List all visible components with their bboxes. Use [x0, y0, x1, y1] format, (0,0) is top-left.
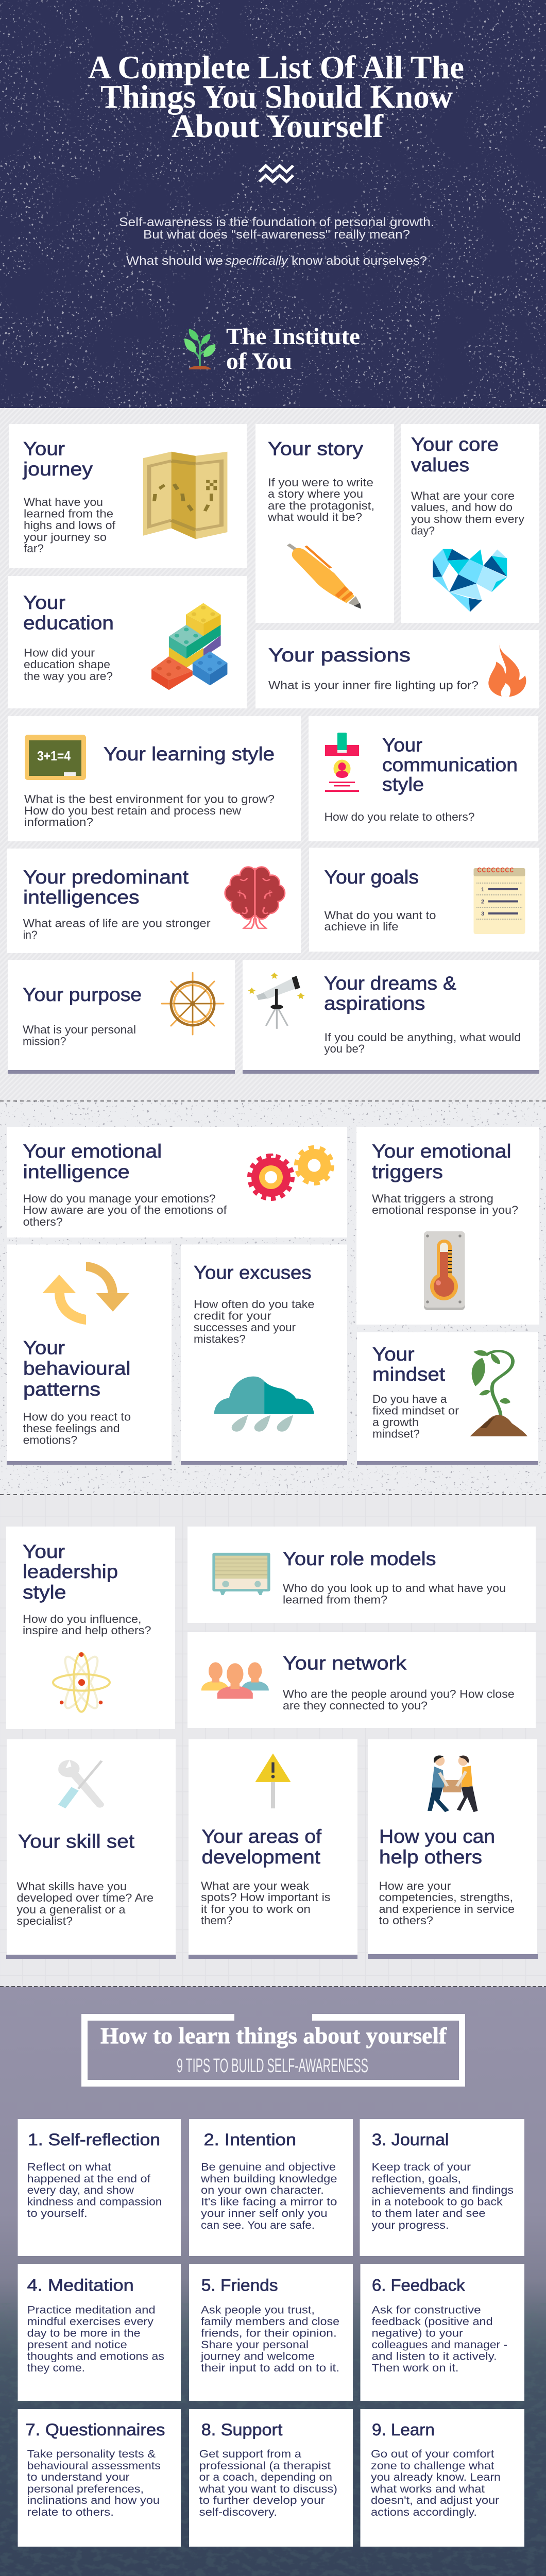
logo: wordmark — [226, 324, 360, 374]
section two speckle texture — [0, 1101, 546, 1495]
body text: What areas of life are you stronger — [23, 917, 211, 929]
body text: in? — [23, 928, 38, 941]
body text: mistakes? — [194, 1332, 246, 1346]
body text: What is the best environment for you to grow? — [24, 792, 275, 806]
tip text — [27, 2448, 161, 2518]
tips section forest background — [0, 1987, 546, 2576]
heading: triggers — [372, 1161, 443, 1182]
tip text — [199, 2448, 337, 2518]
heading — [23, 1141, 162, 1182]
body text: What do you want to — [325, 909, 436, 922]
tip text: actions accordingly. — [371, 2506, 477, 2518]
body text: successes and your — [194, 1321, 296, 1334]
body text: Who do you look up to and what have you — [283, 1582, 506, 1595]
body text: them? — [201, 1914, 233, 1927]
tip text: Ask for constructive — [372, 2304, 481, 2316]
tip heading: 3. Journal — [372, 2130, 449, 2149]
page background: header section — [0, 0, 546, 408]
heading: Your emotional — [372, 1141, 511, 1162]
tip text: achievements and findings — [372, 2184, 514, 2196]
heading: How you can — [379, 1826, 495, 1847]
accent bar — [189, 1955, 357, 1959]
heading: Your skill set — [18, 1831, 135, 1852]
intro text: Self-awareness is the foundation of personal growth. — [119, 215, 434, 229]
heading: Your — [23, 438, 65, 460]
icon: speaker at podium — [325, 733, 359, 792]
tip card: self-reflection — [18, 2119, 181, 2256]
body text: to others? — [379, 1914, 433, 1927]
body text: what would it be? — [267, 511, 362, 523]
heading: Your excuses — [194, 1262, 311, 1283]
intro text — [119, 215, 434, 268]
tip text: colleagues and manager - — [372, 2339, 507, 2351]
body text — [24, 646, 113, 683]
heading — [324, 973, 456, 1014]
body text — [16, 1880, 153, 1927]
body text: your journey so — [24, 531, 107, 544]
tip text: thoughts and emotions as — [27, 2350, 164, 2363]
tip text: you already know. Learn — [371, 2471, 501, 2483]
body text: emotions? — [23, 1434, 77, 1447]
panel: your behavioural patterns — [7, 1245, 172, 1465]
tip text: to further develop your — [199, 2495, 325, 2506]
body text: How do you react to — [23, 1411, 131, 1423]
tip text: to understand your — [27, 2471, 130, 2483]
tips heading box — [81, 2014, 465, 2087]
accent bar — [357, 1461, 538, 1465]
panel: how you can help others — [368, 1739, 538, 1959]
body text: How did your — [24, 646, 95, 659]
heading: Your role models — [283, 1548, 436, 1569]
tip text: Go out of your comfort — [371, 2448, 494, 2460]
heading — [23, 438, 93, 480]
tip text: Ask people you trust, — [201, 2304, 315, 2316]
body text: information? — [24, 816, 93, 828]
body text: spots? How important is — [201, 1891, 331, 1904]
body text: far? — [24, 542, 44, 555]
heading — [382, 735, 518, 795]
body text: it for you to work on — [201, 1903, 311, 1916]
tip text: can see. You are safe. — [201, 2219, 315, 2231]
tip text: or a coach, depending on — [199, 2471, 332, 2483]
heading: style — [382, 774, 424, 795]
panel: your leadership style — [6, 1527, 175, 1729]
heading: Your — [23, 1337, 65, 1358]
panel: your areas of development — [189, 1739, 357, 1959]
body text: highs and lows of — [24, 519, 116, 532]
heading: Your — [23, 592, 65, 613]
body text: you a generalist or a — [16, 1903, 126, 1916]
heading — [202, 1826, 322, 1868]
heading: education — [23, 612, 114, 633]
heading: development — [202, 1846, 321, 1868]
panel: your skill set — [6, 1739, 176, 1959]
header — [88, 49, 464, 374]
heading: Your goals — [325, 867, 419, 888]
tip text: relate to others. — [27, 2506, 114, 2518]
heading — [379, 1826, 495, 1868]
body text: What triggers a strong — [372, 1192, 493, 1205]
tip text: inclinations and how you — [27, 2495, 160, 2506]
section two speckled background — [0, 1101, 546, 1495]
icon: group of people — [201, 1662, 269, 1699]
icon: atom — [53, 1652, 110, 1712]
tip text: mindful exercises every — [27, 2316, 154, 2328]
body text: specialist? — [16, 1914, 73, 1927]
tip card: meditation — [18, 2264, 181, 2401]
heading: Your story — [268, 438, 364, 460]
tip card: feedback — [361, 2264, 524, 2401]
tip text: they come. — [27, 2362, 85, 2374]
heading — [372, 1141, 511, 1182]
body text: mission? — [23, 1035, 66, 1048]
tip text — [372, 2161, 514, 2231]
body text: What is your inner fire lighting up for? — [268, 679, 479, 691]
heading — [23, 1541, 118, 1603]
body text: What are your weak — [201, 1879, 310, 1892]
tip text: journey and welcome — [200, 2350, 315, 2363]
tip text: when building knowledge — [200, 2173, 337, 2185]
heading: How to learn things about yourself — [100, 2023, 447, 2048]
heading: Your network — [283, 1653, 407, 1674]
panel: your story — [255, 424, 394, 623]
panel: your learning style — [8, 716, 301, 841]
accent bar — [243, 1070, 539, 1074]
icon: wrench and screwdriver — [58, 1760, 104, 1808]
panel: your excuses — [181, 1245, 347, 1465]
body text: emotional response in you? — [372, 1204, 518, 1216]
heading: Your dreams & — [324, 973, 456, 994]
tip text: Be genuine and objective — [201, 2161, 336, 2173]
tip heading: 7. Questionnaires — [25, 2420, 165, 2439]
body text: How do you manage your emotions? — [23, 1192, 216, 1205]
body text: a story where you — [268, 487, 363, 500]
icon: flame — [488, 642, 526, 697]
body text: achieve in life — [325, 920, 399, 933]
tip text — [200, 2161, 337, 2231]
heading — [23, 592, 114, 633]
body text: competencies, strengths, — [379, 1891, 513, 1904]
panel: your network — [187, 1632, 536, 1728]
body text: you be? — [325, 1042, 365, 1055]
tip text: friends, for their opinion. — [201, 2328, 337, 2339]
heading: leadership — [23, 1561, 118, 1582]
tip text: Practice meditation and — [27, 2304, 156, 2316]
body text — [379, 1879, 515, 1927]
tip text — [200, 2304, 339, 2374]
heading: Your passions — [268, 645, 411, 666]
accent bar — [368, 1954, 538, 1959]
tip text: happened at the end of — [27, 2173, 150, 2185]
icon: telescope with stars — [248, 972, 305, 1029]
tip text: and listen to it actively. — [372, 2350, 497, 2363]
icon: numbered notepad: 3 — [481, 911, 484, 917]
tip text: Reflect on what — [27, 2161, 111, 2173]
body text: How do you best retain and process new — [24, 804, 241, 817]
tip heading: 2. Intention — [204, 2130, 296, 2149]
tip text: Get support from a — [199, 2448, 301, 2460]
body text — [283, 1688, 515, 1712]
heading: mindset — [372, 1364, 446, 1385]
intro text: know about ourselves? — [292, 254, 427, 268]
body text: others? — [23, 1215, 63, 1228]
forest foliage texture — [0, 2303, 546, 2576]
body text: How are your — [379, 1879, 451, 1892]
tip card: learn — [361, 2409, 524, 2547]
body text: learned from them? — [283, 1593, 387, 1606]
body text: values, and how do — [411, 501, 513, 514]
tip text: on your own character. — [201, 2184, 324, 2196]
panel: your predominant intelligences — [7, 849, 301, 953]
icon: lego bricks — [151, 603, 227, 690]
accent bar — [8, 1070, 235, 1074]
body text: inspire and help others? — [23, 1624, 151, 1637]
heading: Your learning style — [104, 743, 275, 765]
body text — [23, 1411, 131, 1447]
tip text: what works and what — [370, 2483, 485, 2495]
heading: aspirations — [324, 993, 425, 1014]
tip text: to them later and see — [372, 2208, 485, 2219]
panel: your communication style — [309, 716, 538, 841]
panel: your mindset — [357, 1332, 538, 1465]
icon: pen — [288, 545, 361, 609]
panel: your role models — [187, 1527, 536, 1623]
accent bar — [7, 1461, 172, 1465]
icon: brain — [224, 866, 285, 928]
heading: patterns — [23, 1379, 100, 1400]
icon: faceted heart — [433, 549, 507, 612]
panel: your passions — [255, 630, 539, 708]
icon: chalkboard: 3+1=4 — [37, 748, 71, 764]
title — [88, 49, 464, 144]
tip text: Keep track of your — [372, 2161, 471, 2173]
tip text: personal preferences, — [27, 2483, 144, 2495]
body text: If you could be anything, what would — [325, 1031, 521, 1044]
header speckle texture — [0, 0, 546, 408]
title: About Yourself — [172, 108, 384, 144]
heading — [23, 1337, 131, 1400]
tip text: professional (a therapist — [199, 2460, 331, 2472]
icon: ship wheel — [162, 973, 224, 1035]
tip heading: 9. Learn — [372, 2420, 435, 2439]
body text — [23, 1613, 151, 1637]
body text: learned from the — [24, 507, 113, 520]
frame — [81, 2014, 465, 2087]
intro text: specifically — [226, 254, 289, 268]
icon: cycle arrows — [42, 1262, 129, 1325]
body text: What have you — [24, 496, 103, 509]
panel: your emotional intelligence — [7, 1127, 347, 1238]
heading: Your emotional — [23, 1141, 162, 1162]
tip text — [370, 2448, 501, 2518]
body text — [194, 1298, 314, 1346]
body text: developed over time? Are — [16, 1891, 153, 1904]
body text — [24, 792, 275, 828]
icon: two people carrying a box — [428, 1755, 477, 1812]
body text: you show them every — [411, 513, 524, 526]
subheading: 9 TIPS TO BUILD SELF-AWARENESS — [177, 2055, 368, 2077]
body text — [283, 1582, 506, 1606]
body text — [201, 1879, 331, 1927]
section one hatched background — [0, 408, 546, 1101]
panel: your emotional triggers — [356, 1127, 539, 1325]
heading: help others — [379, 1846, 482, 1868]
tip card: journal — [360, 2119, 524, 2256]
tip text: every day, and show — [27, 2184, 134, 2196]
tip text: negative) to your — [372, 2328, 463, 2339]
tip text — [372, 2304, 507, 2374]
body text: What skills have you — [16, 1880, 127, 1893]
heading: Your core — [411, 434, 499, 455]
body text: How aware are you of the emotions of — [23, 1204, 227, 1216]
panel: your core values — [401, 424, 539, 623]
tip text: reflection, goals, — [372, 2173, 461, 2185]
tip text: self-discovery. — [199, 2506, 277, 2518]
body text: fixed mindset or — [372, 1404, 459, 1417]
body text: How do you influence, — [23, 1613, 141, 1625]
body text: day? — [411, 524, 435, 537]
body text — [372, 1192, 518, 1216]
title: Things You Should Know — [100, 78, 453, 115]
icon: numbered notepad — [474, 868, 525, 934]
heading: behavioural — [23, 1358, 131, 1379]
tip card: support — [189, 2409, 353, 2547]
panel: your journey — [9, 424, 247, 568]
body text: are the protagonist, — [268, 499, 374, 512]
body text — [23, 1023, 136, 1048]
heading — [411, 434, 499, 476]
icon: thermometer — [424, 1231, 465, 1310]
tip text — [27, 2161, 162, 2219]
panel: your purpose — [8, 960, 235, 1074]
heading: journey — [23, 459, 93, 480]
tip text: behavioural assessments — [27, 2460, 161, 2472]
intro text: What should we — [126, 254, 223, 268]
heading — [372, 1344, 446, 1385]
tip text: your progress. — [372, 2219, 449, 2231]
panel: your dreams and aspirations — [243, 960, 539, 1074]
tip text: Take personality tests & — [27, 2448, 156, 2460]
body text: the way you are? — [24, 670, 113, 683]
body text — [372, 1393, 459, 1440]
tip text: family members and close — [201, 2316, 339, 2328]
body text — [23, 917, 211, 941]
body text: If you were to write — [268, 476, 373, 489]
tip card: intention — [189, 2119, 353, 2256]
icon: seedling — [470, 1350, 527, 1436]
icon: numbered notepad: 2 — [481, 899, 484, 905]
body text: How often do you take — [194, 1298, 314, 1311]
tip text: zone to challenge what — [371, 2460, 494, 2472]
body text: a growth — [372, 1416, 419, 1429]
body text: are they connected to you? — [283, 1699, 428, 1712]
icon: gears — [250, 1148, 332, 1198]
heading: Your purpose — [23, 984, 142, 1005]
logo: wordmark: The Institute — [226, 324, 360, 349]
body text — [23, 1192, 227, 1228]
heading: Your — [23, 1541, 65, 1562]
tip text: day to be more in the — [27, 2328, 141, 2339]
body text: What is your personal — [23, 1023, 136, 1036]
body text: education shape — [24, 658, 110, 671]
tip text: their input to add on to it. — [201, 2362, 339, 2374]
tip text: doesn't, and adjust your — [371, 2495, 499, 2506]
icon: warning sign — [255, 1753, 291, 1808]
body text: Do you have a — [372, 1393, 447, 1405]
tip heading: 8. Support — [201, 2420, 282, 2439]
tip card: questionnaires — [18, 2409, 181, 2547]
tip card: friends — [189, 2264, 353, 2401]
icon: rain cloud — [214, 1377, 314, 1432]
tip heading: 5. Friends — [201, 2276, 278, 2295]
heading: intelligence — [23, 1161, 130, 1182]
body text — [411, 489, 524, 537]
icon: vintage radio — [212, 1553, 270, 1595]
panel: your education — [8, 576, 247, 708]
tip heading: 6. Feedback — [372, 2276, 466, 2295]
body text — [325, 1031, 521, 1055]
tip text: present and notice — [27, 2339, 127, 2351]
tip text: feedback (positive and — [372, 2316, 493, 2328]
accent bar — [181, 1461, 347, 1465]
tip text — [27, 2304, 164, 2374]
logo: sprout icon — [184, 329, 215, 369]
tip text: your inner self only you — [201, 2208, 328, 2219]
panel: your goals — [309, 848, 539, 952]
heading: style — [23, 1582, 66, 1603]
section three grid background — [0, 1495, 546, 1987]
accent bar — [6, 1955, 176, 1959]
tip text: in a notebook to go back — [372, 2196, 503, 2208]
body text — [267, 476, 374, 523]
intro text: But what does "self-awareness" really mean? — [143, 228, 410, 242]
heading: Your — [372, 1344, 415, 1365]
body text — [325, 909, 436, 933]
logo: wordmark: of You — [226, 348, 292, 374]
icon: chalkboard — [25, 735, 86, 780]
title: A Complete List Of All The — [88, 49, 464, 86]
body text: these feelings and — [23, 1422, 120, 1435]
heading: Your predominant — [23, 867, 189, 888]
heading: Your — [382, 735, 422, 755]
tip text: It's like facing a mirror to — [201, 2196, 337, 2208]
heading: Your areas of — [202, 1826, 322, 1847]
heading: intelligences — [23, 887, 139, 908]
tip text: Share your personal — [201, 2339, 309, 2351]
heading — [23, 867, 189, 908]
tip heading: 4. Meditation — [27, 2276, 134, 2295]
body text: What are your core — [411, 489, 515, 502]
icon: zigzag waves — [260, 165, 293, 182]
body text: Who are the people around you? How close — [283, 1688, 515, 1701]
body text: credit for your — [194, 1310, 271, 1322]
tip text: what you want to discuss) — [199, 2483, 337, 2495]
heading: communication — [382, 754, 518, 775]
icon: numbered notepad: 1 — [481, 887, 484, 893]
body text: mindset? — [372, 1428, 420, 1440]
body text: and experience in service — [379, 1903, 515, 1916]
body text — [24, 496, 116, 555]
body text: How do you relate to others? — [325, 810, 475, 823]
tip text: to yourself. — [27, 2208, 88, 2219]
tip text: kindness and compassion — [27, 2196, 162, 2208]
heading: values — [411, 454, 469, 476]
tip heading: 1. Self-reflection — [28, 2130, 160, 2149]
icon: treasure map — [143, 452, 227, 539]
tip text: Then work on it. — [372, 2362, 458, 2374]
